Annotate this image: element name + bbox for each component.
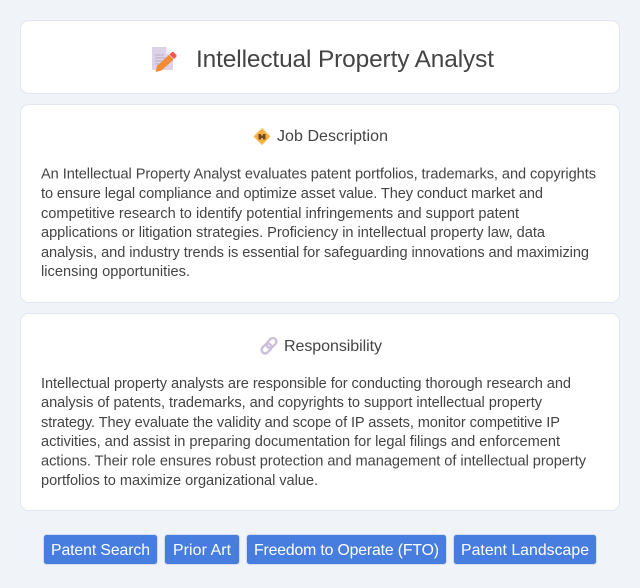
text block: responsibility: strategy. They evaluate the validity and scope of IP assets, monitor competitive IP — [41, 415, 560, 431]
icon: chain link — [260, 337, 278, 355]
icon: orange diamond — [254, 128, 270, 144]
panel: title header — [20, 20, 620, 94]
text block: responsibility: actions. Their role ensures robust protection and management of intellectual property — [41, 454, 587, 470]
tag: Patent Landscape: Patent Landscape — [461, 542, 589, 559]
tag: Prior Art: Prior Art — [173, 542, 232, 559]
heading: responsibility: Responsibility — [284, 338, 382, 355]
icon: document with pencil — [152, 47, 176, 72]
title: Intellectual Property Analyst — [196, 46, 494, 73]
tag: Freedom to Operate (FTO): Freedom to Operate (FTO) — [254, 542, 439, 559]
text block: responsibility — [41, 376, 587, 489]
text block: job description: analysis, and industry trends is essential for safeguarding innovations and maximizing — [41, 245, 589, 261]
text block: job description: licensing opportunities. — [41, 264, 190, 280]
text block: responsibility: Intellectual property analysts are responsible for conducting thorough research and — [41, 376, 571, 392]
text block: job description: to ensure legal compliance and optimize asset value. They conduct market and — [41, 186, 543, 202]
text block: responsibility: activities, and assist in preparing documentation for legal filings and enforcement — [41, 434, 560, 450]
tag: Freedom to Operate (FTO) — [246, 534, 446, 564]
text block: job description: An Intellectual Property Analyst evaluates patent portfolios, trademarks, and copyrights — [41, 166, 596, 182]
tag: Patent Search: Patent Search — [51, 542, 150, 559]
tag: Prior Art — [164, 534, 240, 564]
text block: responsibility: analysis of patents, trademarks, and copyrights to support intellectual property — [41, 395, 543, 411]
panel: job description — [20, 104, 620, 302]
text block: job description: competitive research to identify potential infringements and support patent — [41, 206, 519, 222]
tag: Patent Landscape — [454, 534, 596, 564]
heading: job description: Job Description — [277, 128, 388, 145]
panel: responsibility — [20, 314, 620, 510]
text block: job description — [41, 166, 596, 280]
text block: responsibility: portfolios to maximize organizational value. — [41, 473, 318, 489]
tag: Patent Search — [44, 534, 158, 564]
text block: job description: applications or litigation strategies. Proficiency in intellectual property law, data — [41, 225, 546, 241]
